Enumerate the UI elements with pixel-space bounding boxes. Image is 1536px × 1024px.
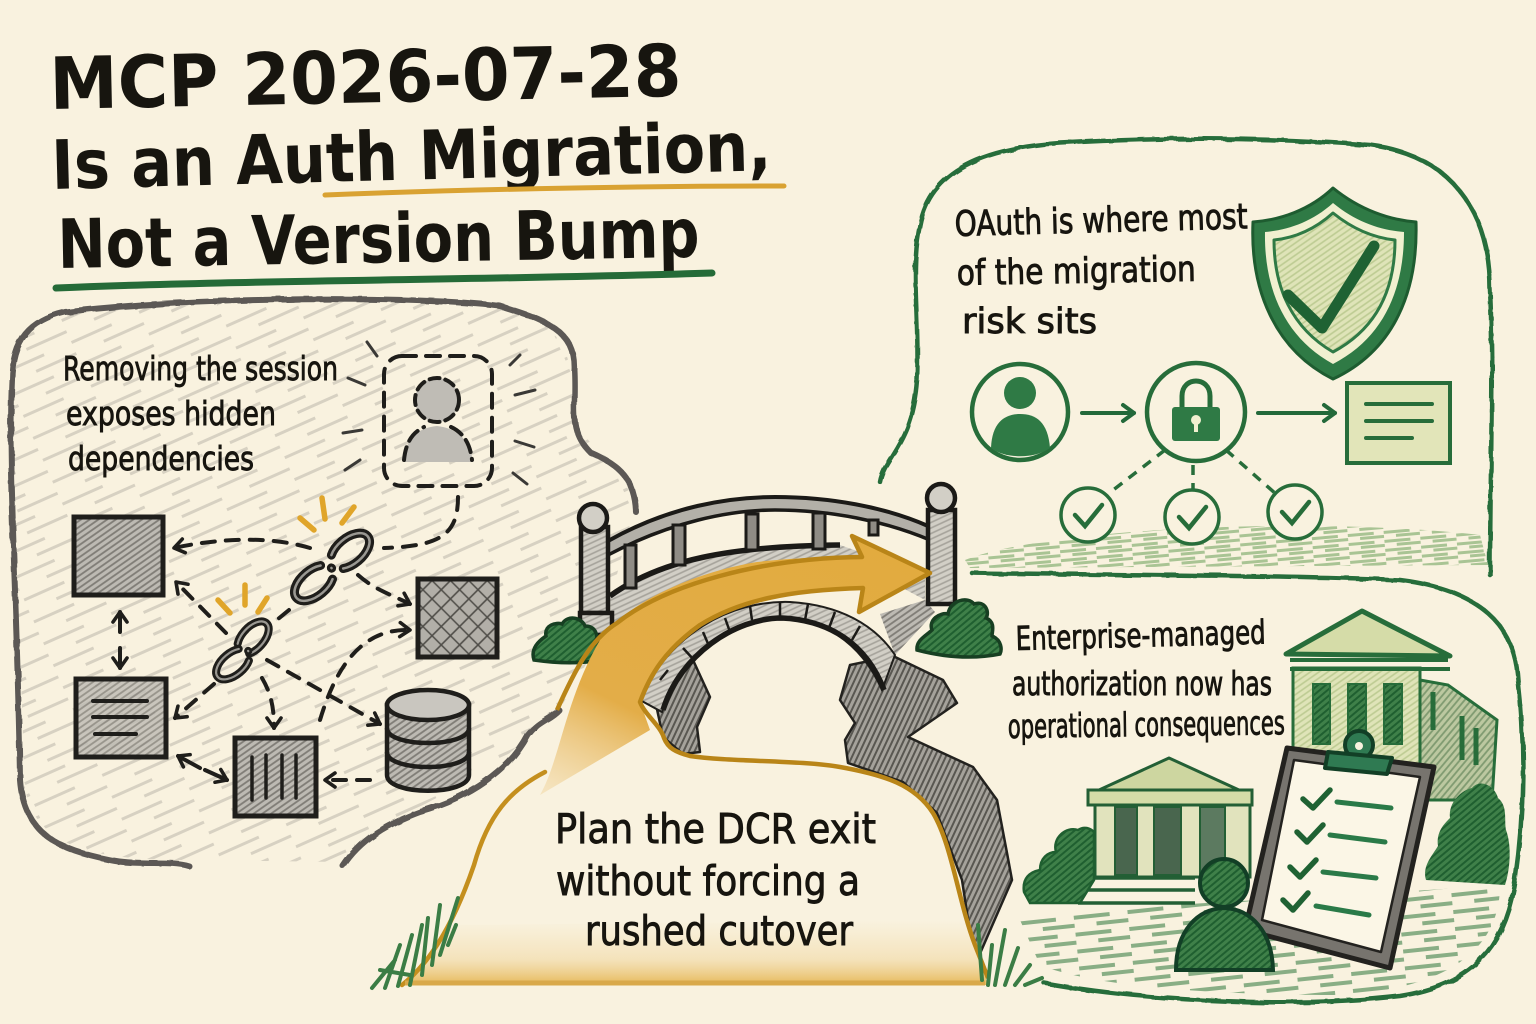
grass: right <box>978 925 1042 985</box>
arrow: lock to document <box>1258 411 1335 415</box>
panel text: of the migration <box>956 250 1196 294</box>
title underline: ochre <box>325 186 784 195</box>
icon: barred box <box>235 738 316 816</box>
bush: right of clipboard <box>1425 783 1510 885</box>
icon: front building <box>1078 758 1252 903</box>
dashed connectors <box>1108 450 1276 494</box>
panel text <box>954 197 1248 342</box>
arch inner edge <box>663 618 884 710</box>
icon: person <box>1176 859 1273 970</box>
icon: document <box>1347 383 1450 463</box>
icon: broken link upper <box>288 526 376 608</box>
grass: left <box>372 898 458 988</box>
icon: break sparks <box>218 498 354 613</box>
icon: lock in circle <box>1147 363 1245 461</box>
icon: broken link lower <box>211 616 275 685</box>
icon: crosshatched box <box>418 579 497 657</box>
panel outline <box>11 299 636 866</box>
cliff: right wall <box>840 656 1012 965</box>
icon: gray box <box>74 517 163 595</box>
arrow: user to lock <box>1082 411 1134 415</box>
text: plan the DCR exit <box>555 805 876 955</box>
panel shading <box>11 300 635 862</box>
cliff: left fragment <box>655 660 710 754</box>
path base shading <box>400 920 988 985</box>
railing <box>608 497 930 596</box>
panel: session dependencies <box>11 299 636 866</box>
text: plan the DCR exit: Plan the DCR exit <box>555 805 876 853</box>
bridge post left <box>579 504 612 635</box>
text: plan the DCR exit: rushed cutover <box>585 907 853 955</box>
dashed dependency arrows <box>174 497 458 780</box>
winding path base <box>400 730 988 985</box>
panel text: Removing the session <box>63 349 338 388</box>
title: Not a Version Bump <box>57 195 700 285</box>
bridge deck <box>610 545 925 650</box>
panel text: operational consequences <box>1008 703 1285 746</box>
icon: clipboard <box>1245 731 1434 968</box>
icon: removed session user <box>343 342 535 486</box>
panel text: dependencies <box>68 439 254 478</box>
icon: database <box>387 690 469 791</box>
panel ground shading <box>965 526 1488 568</box>
panel text: risk sits <box>962 302 1097 342</box>
panel: enterprise authorization <box>972 573 1523 1002</box>
bridge arch stones <box>640 602 895 712</box>
icon: user in circle <box>972 364 1068 460</box>
double arrows <box>120 612 227 780</box>
title underline: green <box>56 273 712 288</box>
ochre arrow path over bridge <box>402 536 988 985</box>
bush: right of bridge <box>917 600 1001 657</box>
arch stone joints <box>660 602 860 680</box>
icon: shield with check <box>1253 188 1416 379</box>
title: Is an Auth Migration, <box>50 108 772 206</box>
hillside under arrow head <box>880 600 935 655</box>
title <box>49 29 772 285</box>
panel outline <box>972 573 1523 1002</box>
panel text: OAuth is where most <box>954 197 1248 245</box>
panel outline <box>880 139 1492 575</box>
path left edge <box>402 772 545 985</box>
panel text: Enterprise-managed <box>1015 612 1266 658</box>
icon: check circles <box>1061 485 1322 544</box>
panel text <box>1008 612 1285 746</box>
cliff <box>655 656 1012 965</box>
panel text <box>63 349 338 478</box>
bridge post right <box>927 484 955 604</box>
icon: back building <box>1286 611 1497 800</box>
arrow fill <box>540 536 930 795</box>
panel text: authorization now has <box>1012 664 1272 703</box>
bridge <box>579 484 955 712</box>
icon: document box <box>76 679 166 757</box>
panel text: exposes hidden <box>66 394 276 433</box>
panel: OAuth risk <box>880 139 1492 575</box>
bush: by front building <box>1024 828 1094 903</box>
text: plan the DCR exit: without forcing a <box>556 857 860 905</box>
path bottom edge <box>405 980 985 986</box>
bush: left of bridge <box>533 618 605 663</box>
panel ground shading <box>1020 885 1500 995</box>
title: MCP 2026-07-28 <box>49 29 682 126</box>
arrow outline <box>557 536 988 978</box>
